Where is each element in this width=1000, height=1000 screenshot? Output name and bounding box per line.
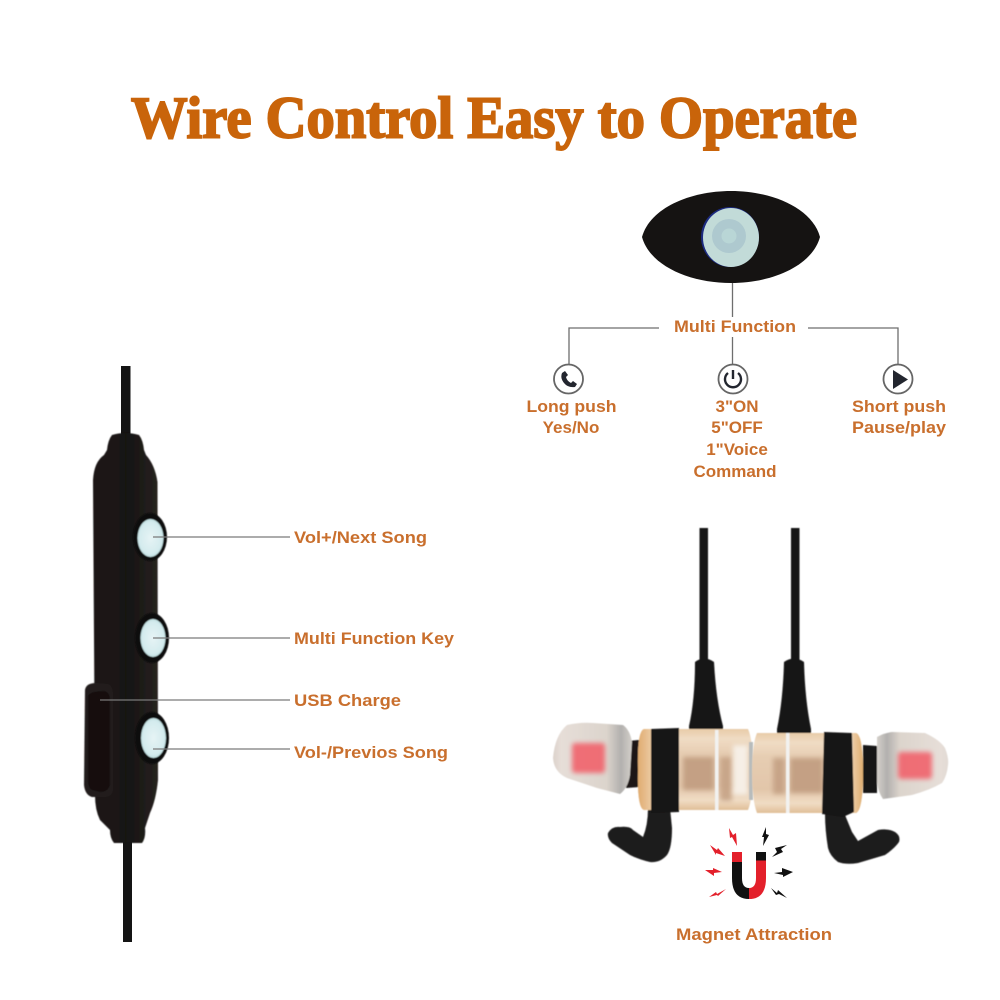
remote cord <box>121 366 132 942</box>
icon: magnet <box>705 827 793 899</box>
panel: inline remote control <box>84 366 455 942</box>
panel: multi function diagram <box>526 191 947 481</box>
text: power timings: 3"ON <box>715 397 759 416</box>
remote body <box>84 433 158 843</box>
button close-up <box>642 191 820 283</box>
remote leader lines <box>100 537 290 749</box>
text: long push <box>526 397 616 437</box>
text: short push <box>852 397 947 437</box>
left earbud <box>553 528 753 862</box>
heading: Multi Function: Multi Function <box>674 317 796 336</box>
label: Vol-/Previos Song: Vol-/Previos Song <box>294 743 448 762</box>
label: Magnet Attraction: Magnet Attraction <box>676 925 832 944</box>
text: power timings: Command <box>693 462 777 481</box>
text: long push: Long push <box>526 397 616 416</box>
panel: magnetic earbuds <box>553 528 948 944</box>
icon: play <box>884 364 912 394</box>
connector lines <box>569 283 898 365</box>
label: Vol+/Next Song: Vol+/Next Song <box>294 528 427 547</box>
text: power timings: 5"OFF <box>711 418 763 437</box>
icon: power <box>718 364 748 394</box>
remote buttons <box>133 513 169 764</box>
text: power timings: 1"Voice <box>706 440 768 459</box>
label: Multi Function Key: Multi Function Key <box>294 629 455 648</box>
text: long push: Yes/No <box>543 418 599 437</box>
text: power timings <box>693 397 777 481</box>
icon: phone <box>554 364 583 394</box>
text: short push: Pause/play <box>852 418 947 437</box>
label: USB Charge: USB Charge <box>294 691 401 710</box>
title: Wire Control Easy to Operate <box>131 84 857 150</box>
text: short push: Short push <box>852 397 946 416</box>
right earbud <box>752 528 948 864</box>
